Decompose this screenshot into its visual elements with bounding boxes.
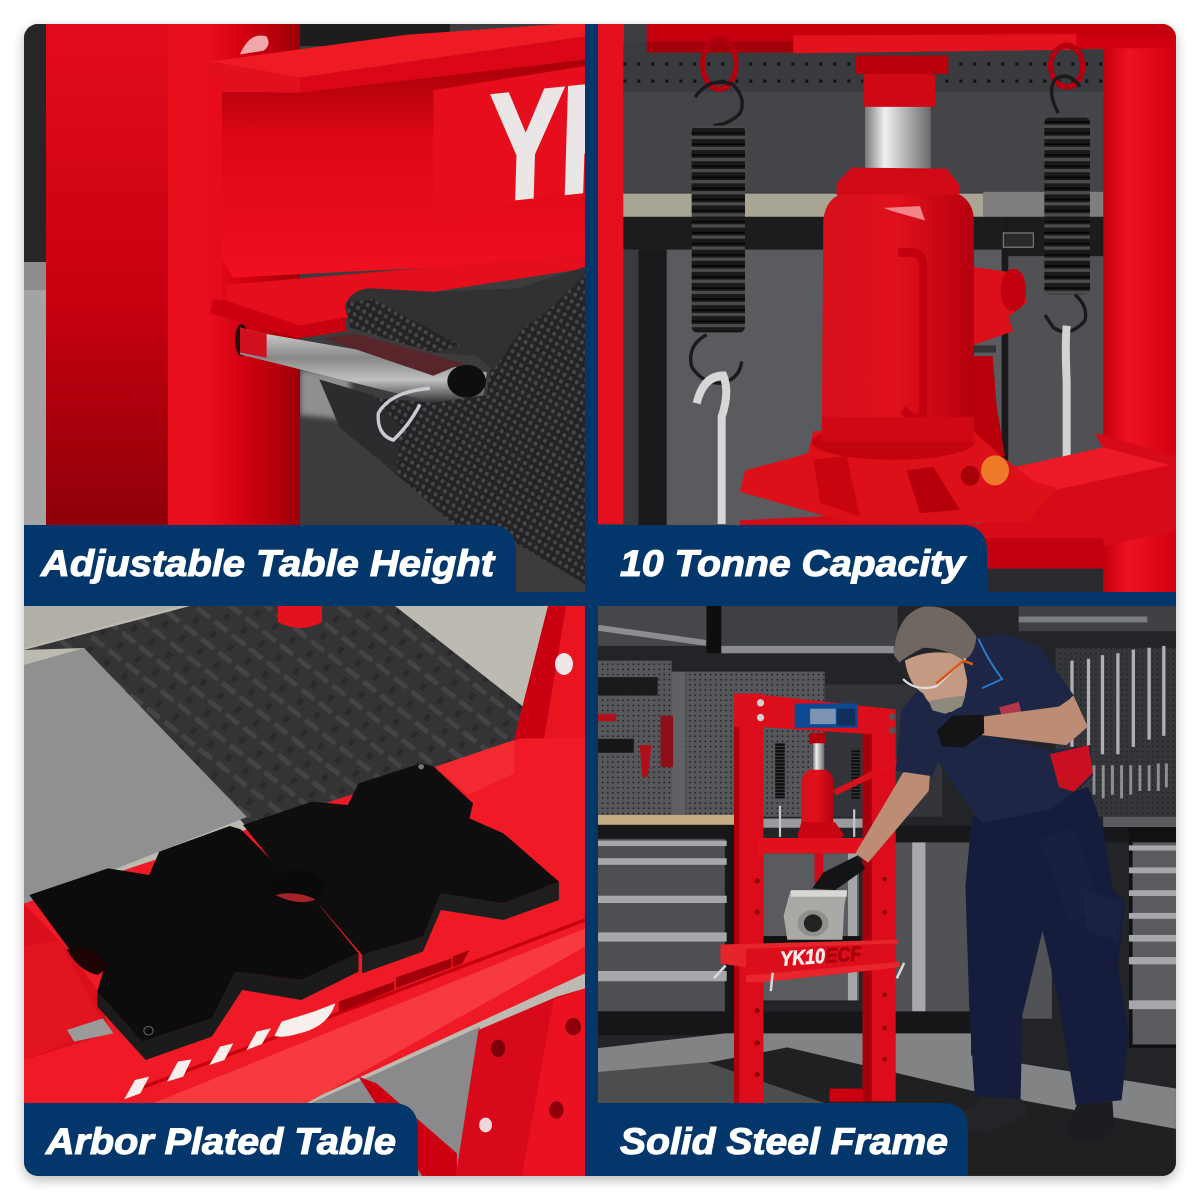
- man: boots: [962, 1096, 1114, 1140]
- label: solid steel frame: Solid Steel Frame: [620, 1121, 948, 1162]
- jack base: [740, 417, 1057, 524]
- label: adjustable table height: Adjustable Table Height: [40, 543, 496, 584]
- steel pin: [235, 324, 487, 403]
- drawers left: [598, 839, 727, 1011]
- hanging tools: [598, 646, 1166, 798]
- press lower table: ECF: [825, 942, 863, 968]
- floor below table: [303, 1027, 480, 1180]
- hook rings: [703, 39, 1083, 89]
- grey floor: [24, 648, 247, 905]
- top beam: [647, 24, 1177, 53]
- red column: [46, 24, 300, 526]
- drawers right: [1129, 842, 1177, 1044]
- pegboards: [598, 648, 1177, 817]
- workshop background: [623, 42, 1104, 525]
- table channel: [210, 22, 585, 338]
- background cabinet under press: [763, 853, 859, 1000]
- panel: adjustable table height: [24, 24, 585, 592]
- right spring: [1044, 76, 1090, 485]
- right frame column: [514, 606, 585, 741]
- table surface: [24, 738, 585, 1103]
- label: arbor plated table: Arbor Plated Table: [45, 1121, 396, 1162]
- label: adjustable table height: [24, 525, 516, 592]
- press lower table: YK10: [779, 945, 826, 971]
- bottle jack body: [822, 168, 974, 449]
- man: navy polo shirt: [896, 633, 1093, 823]
- panel: solid steel frame: [598, 600, 1178, 1180]
- black glove: [319, 267, 585, 584]
- arbor plate right: [243, 763, 559, 973]
- frame right column: [1103, 48, 1176, 634]
- lower frame column: [455, 988, 585, 1180]
- man: black gloves: [812, 715, 984, 890]
- lower table: [740, 432, 1176, 592]
- panel: 10 tonne capacity: [598, 24, 1177, 643]
- panel: arbor plated table: [24, 606, 585, 1180]
- wall cabinets: [598, 606, 1177, 653]
- label: 10 tonne capacity: 10 Tonne Capacity: [620, 543, 968, 584]
- label: solid steel frame: [598, 1103, 968, 1176]
- arbor plate left: [29, 826, 359, 1060]
- press ram tip: [278, 606, 322, 628]
- workbench: [598, 815, 1177, 1048]
- label: arbor plated table: [24, 1103, 418, 1176]
- floor: [598, 1011, 1176, 1176]
- rubber mat: [24, 606, 530, 825]
- workshop press: [734, 694, 939, 1103]
- left spring: [691, 82, 745, 524]
- table logo: [124, 1003, 335, 1099]
- logo plate: [433, 66, 585, 150]
- jack collar and ram: [855, 55, 948, 171]
- strut: [359, 1077, 457, 1180]
- lifting hook: [240, 35, 269, 54]
- frame left column: [598, 24, 624, 524]
- man: trousers: [965, 787, 1129, 1105]
- man: left arm: [855, 767, 931, 863]
- table logo slots: [339, 950, 469, 1013]
- press lower table: [714, 940, 904, 991]
- man: right arm: [982, 696, 1088, 745]
- jack filler port: [973, 267, 1027, 456]
- label: 10 tonne capacity: [598, 525, 987, 592]
- engine block workpiece: [763, 890, 861, 945]
- man: head: [894, 606, 976, 714]
- logo text: YK: [481, 49, 650, 232]
